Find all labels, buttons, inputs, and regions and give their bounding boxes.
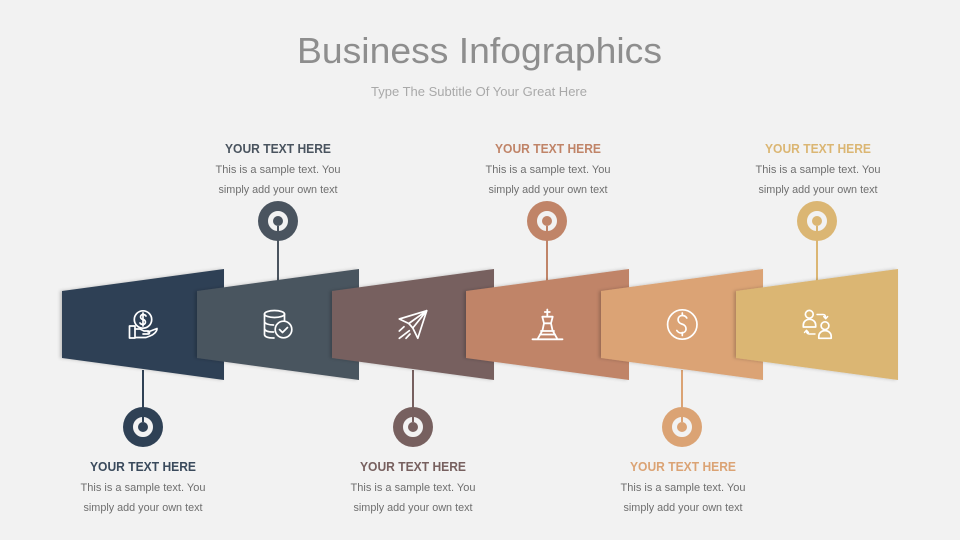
text block: step 3: YOUR TEXT HERE — [360, 460, 466, 474]
text block: step 3: simply add your own text — [354, 502, 472, 514]
text block: step 6: This is a sample text. You — [756, 164, 880, 176]
text block: step 5: This is a sample text. You — [620, 482, 746, 494]
icon: paper plane — [399, 311, 427, 338]
text block: step 6: simply add your own text — [758, 184, 878, 196]
text block: step 3 — [350, 460, 476, 514]
panel: step 6 trapezoid — [736, 269, 898, 380]
title: Business Infographics — [297, 30, 662, 71]
connector: step 2 — [277, 222, 279, 284]
icon: chess king — [532, 310, 562, 339]
text block: step 1: YOUR TEXT HERE — [90, 460, 196, 474]
text block: step 4: This is a sample text. You — [486, 164, 610, 176]
subtitle: Type The Subtitle Of Your Great Here — [371, 84, 587, 99]
text block: step 1: simply add your own text — [84, 502, 202, 514]
panel: step 5 trapezoid — [601, 269, 763, 380]
icon: dollar in circle — [668, 310, 697, 339]
text block: step 4 — [486, 142, 610, 196]
marker: step 6 — [797, 201, 837, 241]
icon: hand holding coin — [130, 311, 157, 338]
marker: step 3 — [393, 407, 433, 447]
connector: step 6 — [816, 222, 818, 284]
marker: step 1 — [123, 407, 163, 447]
connector: step 4 — [546, 222, 548, 284]
text block: step 4: YOUR TEXT HERE — [495, 142, 601, 156]
text block: step 1: This is a sample text. You — [80, 482, 206, 494]
text block: step 5: YOUR TEXT HERE — [630, 460, 736, 474]
marker: step 2 — [258, 201, 298, 241]
text block: step 2: YOUR TEXT HERE — [225, 142, 331, 156]
text block: step 1 — [80, 460, 206, 514]
connector: step 3 — [412, 370, 414, 422]
text block: step 5 — [620, 460, 746, 514]
text block: step 2: This is a sample text. You — [216, 164, 340, 176]
marker: step 5 — [662, 407, 702, 447]
panel: step 1 trapezoid — [62, 269, 224, 380]
text block: step 3: This is a sample text. You — [350, 482, 476, 494]
connector: step 5 — [681, 370, 683, 422]
text block: step 2 — [216, 142, 340, 196]
text block: step 2: simply add your own text — [218, 184, 338, 196]
text block: step 6: YOUR TEXT HERE — [765, 142, 871, 156]
text block: step 5: simply add your own text — [624, 502, 742, 514]
text block: step 6 — [756, 142, 880, 196]
panel: step 2 trapezoid — [197, 269, 359, 380]
panel: step 4 trapezoid — [466, 269, 629, 380]
marker: step 4 — [527, 201, 567, 241]
icon: database with check — [264, 310, 292, 338]
panel: step 3 trapezoid — [332, 269, 494, 380]
text block: step 4: simply add your own text — [488, 184, 608, 196]
icon: people exchange — [803, 310, 831, 338]
connector: step 1 — [142, 370, 144, 422]
